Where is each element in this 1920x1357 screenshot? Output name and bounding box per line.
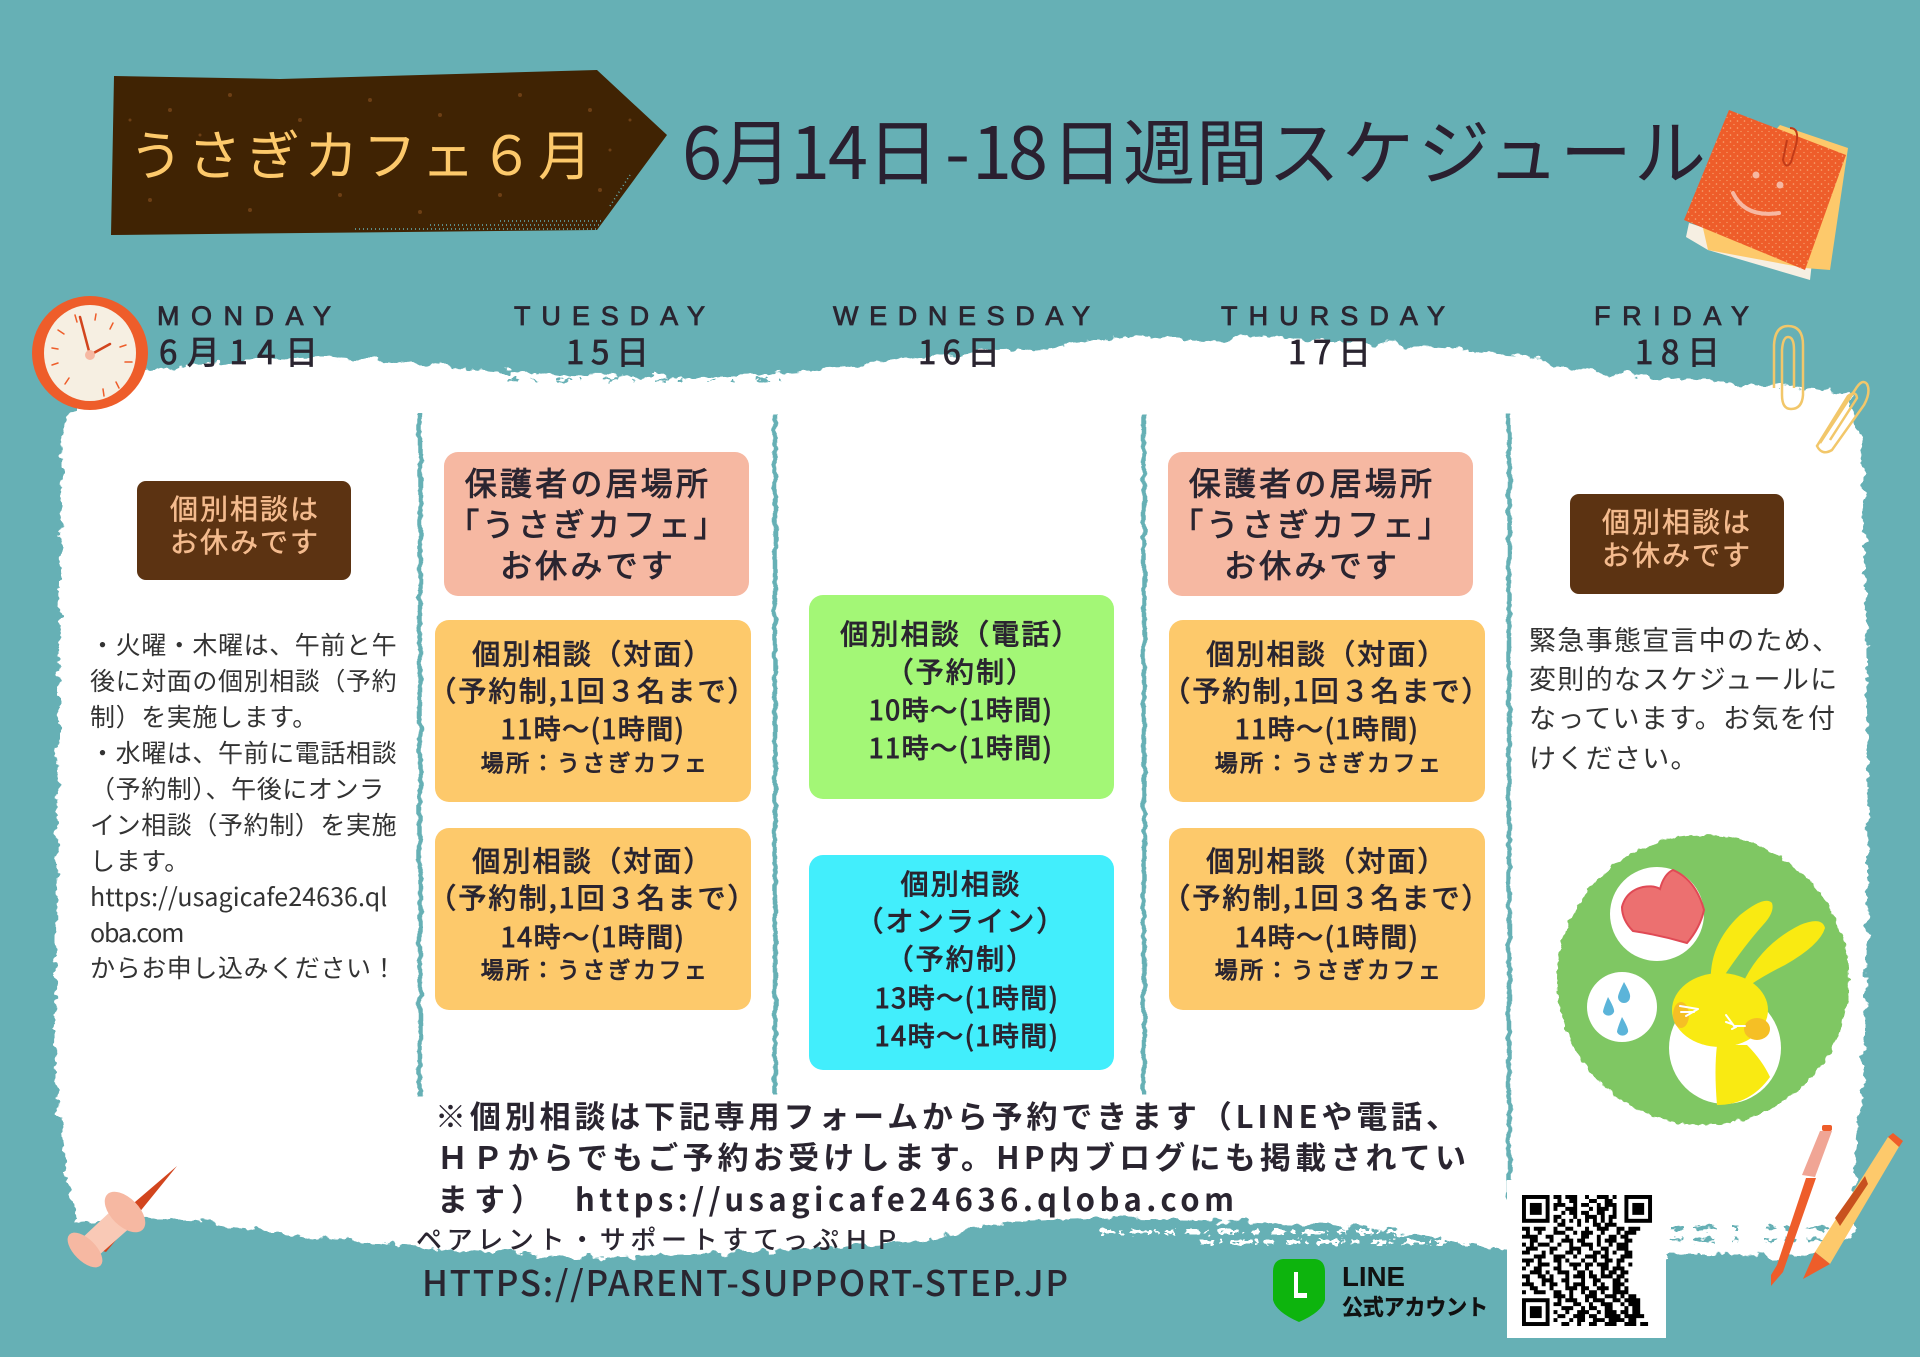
Thursday closed notice: お休みです (1224, 541, 1400, 587)
panel: Thursday (1162, 452, 1492, 1010)
Tuesday morning session: 場所：うさぎカフェ (481, 744, 709, 778)
Thursday morning session (1162, 620, 1492, 802)
Monday closed notice (137, 481, 351, 580)
Tuesday closed notice: お休みです (500, 541, 676, 587)
Monday heading: MONDAY (157, 301, 331, 331)
Monday note text: からお申し込みください！ (90, 949, 397, 985)
Tuesday heading: TUESDAY (514, 301, 705, 331)
Friday heading: 18日 (1635, 326, 1720, 374)
parent support website: HTTPS://PARENT-SUPPORT-STEP.JP (422, 1256, 1068, 1307)
Tuesday afternoon session: 場所：うさぎカフェ (481, 951, 709, 985)
Monday closed notice: 個別相談は (170, 488, 320, 528)
Tuesday morning session: （予約制,1回３名まで） (428, 670, 758, 710)
Wednesday phone session (809, 595, 1114, 799)
Thursday closed notice: 「うさぎカフェ」 (1171, 500, 1453, 546)
panel: Friday (1529, 494, 1840, 776)
Monday note text: 制）を実施します。 (90, 698, 318, 734)
title: 6月14日-18日週間スケジュール (682, 95, 1706, 200)
banner speckles (128, 93, 632, 214)
Friday note text: 緊急事態宣言中のため、 (1529, 619, 1840, 658)
Monday note text: ・火曜・木曜は、午前と午 (90, 626, 397, 662)
Thursday morning session: 場所：うさぎカフェ (1215, 744, 1443, 778)
Wednesday phone session: 11時～(1時間) (869, 727, 1053, 766)
Thursday afternoon session: 14時～(1時間) (1235, 916, 1419, 955)
Thursday morning session: （予約制,1回３名まで） (1162, 670, 1492, 710)
banner (111, 70, 667, 235)
Wednesday online session: 個別相談 (901, 863, 1021, 903)
column dividers (420, 414, 1509, 1205)
LINE official account logo: LINE (1342, 1261, 1405, 1292)
Tuesday heading: 15日 (566, 326, 649, 374)
Thursday afternoon session: （予約制,1回３名まで） (1162, 877, 1492, 917)
Tuesday morning session: 11時～(1時間) (501, 708, 685, 747)
red pen (1771, 1125, 1832, 1286)
Monday note text: （予約制）、午後にオンラ (90, 770, 385, 806)
Wednesday phone session: （予約制） (885, 651, 1037, 691)
Thursday morning session: 個別相談（対面） (1206, 633, 1448, 673)
Tuesday heading (514, 301, 705, 374)
Friday note text: 変則的なスケジュールに (1529, 658, 1838, 697)
Friday closed notice: お休みです (1602, 534, 1752, 574)
Wednesday heading (833, 301, 1090, 374)
icon: water drops (1587, 972, 1657, 1042)
Wednesday online session (809, 855, 1114, 1070)
illustration: rabbit on green blob (1557, 835, 1849, 1125)
torn white paper panel (55, 336, 1868, 1262)
icon: pens (1771, 1125, 1903, 1286)
Thursday closed notice: 保護者の居場所 (1189, 459, 1435, 505)
Wednesday online session: 13時～(1時間) (875, 977, 1059, 1016)
Friday note text (1529, 619, 1840, 776)
reservation note: ます） (437, 1175, 542, 1220)
Thursday morning session: 11時～(1時間) (1235, 708, 1419, 747)
Thursday afternoon session: 個別相談（対面） (1206, 840, 1448, 880)
Monday heading: 6月14日 (159, 326, 318, 374)
parent support website: ペアレント・サポートすてっぷＨＰ (416, 1220, 900, 1257)
weekday headings (157, 301, 1749, 374)
reservation note: https://usagicafe24636.qloba.com (575, 1175, 1234, 1220)
reservation note: ＨＰからでもご予約お受けします。HP内ブログにも掲載されてい (437, 1133, 1466, 1178)
parent support website (416, 1220, 1068, 1307)
Thursday closed notice (1168, 452, 1473, 596)
Thursday heading: THURSDAY (1221, 301, 1445, 331)
Tuesday morning session: 個別相談（対面） (472, 633, 714, 673)
Friday note text: なっています。お気を付 (1529, 697, 1836, 736)
Monday note text: イン相談（予約制）を実施 (90, 806, 397, 842)
Thursday heading (1221, 301, 1445, 374)
Tuesday afternoon session (428, 828, 758, 1010)
speckled torn edge texture (510, 372, 1850, 1242)
Thursday afternoon session (1162, 828, 1492, 1010)
LINE official account logo: 公式アカウント (1342, 1290, 1488, 1322)
reservation note (435, 1092, 1466, 1220)
Monday note text: します。 (90, 842, 190, 878)
Wednesday online session: （オンライン） (855, 900, 1067, 940)
icon: paper clips (1774, 326, 1868, 452)
Tuesday closed notice (444, 452, 749, 596)
panel: Wednesday (809, 595, 1114, 1070)
LINE official account logo (1273, 1259, 1488, 1322)
Tuesday afternoon session: 14時～(1時間) (501, 916, 685, 955)
Wednesday online session: （予約制） (885, 938, 1037, 978)
icon: clock (32, 296, 148, 410)
icon: sticky notes (1684, 110, 1848, 280)
icon: push pin (62, 1166, 177, 1273)
icon: heart (1610, 867, 1704, 961)
Thursday heading: 17日 (1288, 326, 1371, 374)
Monday note text: 後に対面の個別相談（予約 (90, 662, 397, 698)
Tuesday closed notice: 保護者の居場所 (465, 459, 711, 505)
Monday heading (157, 301, 331, 374)
panel: Tuesday (428, 452, 758, 1010)
reservation note: ※個別相談は下記専用フォームから予約できます（LINEや電話、 (435, 1092, 1457, 1137)
Tuesday morning session (428, 620, 758, 802)
Friday closed notice: 個別相談は (1602, 501, 1752, 541)
Monday note text: oba.com (90, 914, 185, 950)
Wednesday heading: 16日 (918, 326, 1000, 374)
Friday heading: FRIDAY (1594, 301, 1749, 331)
QR finder squares (1524, 1197, 1650, 1324)
panel: Monday (90, 481, 397, 985)
rabbit (1669, 901, 1825, 1105)
Tuesday afternoon session: 個別相談（対面） (472, 840, 714, 880)
Wednesday phone session: 個別相談（電話） (840, 613, 1082, 653)
Wednesday online session: 14時～(1時間) (875, 1015, 1059, 1054)
Tuesday afternoon session: （予約制,1回３名まで） (428, 877, 758, 917)
banner rough bottom edge (355, 175, 630, 229)
Tuesday closed notice: 「うさぎカフェ」 (447, 500, 729, 546)
Monday note text (90, 626, 397, 985)
QR code (1507, 1180, 1666, 1338)
Monday note text: ・水曜は、午前に電話相談 (90, 734, 397, 770)
Wednesday heading: WEDNESDAY (833, 301, 1090, 331)
Thursday afternoon session: 場所：うさぎカフェ (1215, 951, 1443, 985)
banner label: うさぎカフェ６月 (129, 112, 592, 191)
Monday note text: https://usagicafe24636.ql (90, 878, 388, 914)
Monday closed notice: お休みです (170, 521, 320, 561)
Friday note text: けください。 (1529, 737, 1699, 776)
Friday closed notice (1570, 494, 1784, 594)
yellow pencil (1803, 1133, 1903, 1279)
Friday heading (1594, 301, 1749, 374)
Wednesday phone session: 10時～(1時間) (869, 689, 1053, 728)
